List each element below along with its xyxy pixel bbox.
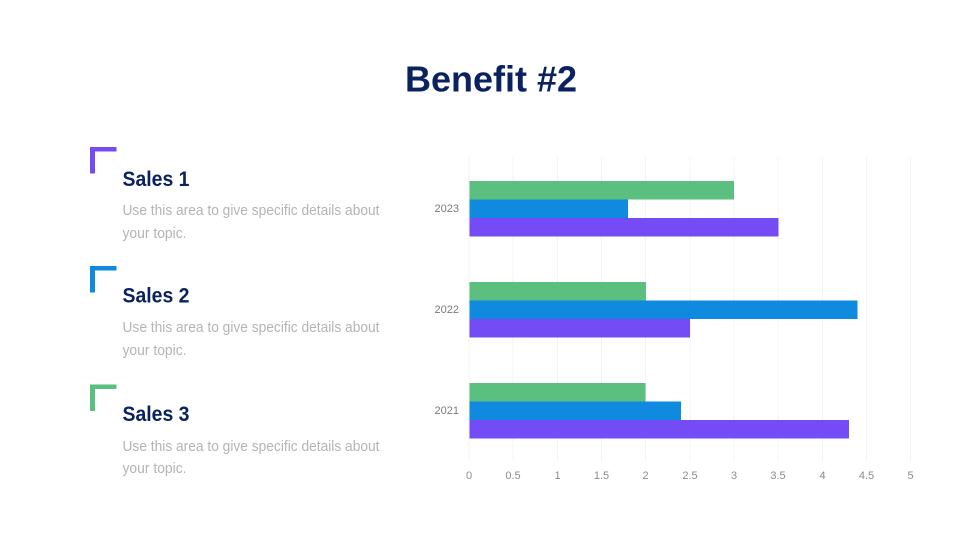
x axis labels: 4.5 [859, 470, 874, 482]
x axis labels: 1.5 [594, 470, 609, 482]
panel: sales 2 [90, 266, 380, 359]
x axis labels [466, 470, 914, 482]
y axis labels: 2022 [435, 304, 459, 316]
icon: purple corner bracket [90, 147, 116, 174]
x axis labels: 3 [731, 470, 737, 482]
x axis labels: 2 [642, 470, 649, 482]
icon: blue corner bracket [90, 266, 116, 292]
x axis labels: 3.5 [770, 470, 786, 482]
bars: 2022 [470, 282, 858, 338]
panel: sales 1 [90, 147, 380, 242]
text block: sales 2 details: your topic. [122, 343, 186, 359]
bars: 2021 [470, 383, 849, 438]
icon: green corner bracket [90, 384, 116, 411]
y axis labels: 2021 [435, 405, 459, 417]
y axis labels: 2023 [435, 203, 459, 215]
x axis labels: 0 [466, 470, 472, 482]
bars: 2023 [470, 181, 778, 236]
text block: sales 3 details: your topic. [122, 461, 186, 477]
title: Benefit #2 [405, 58, 577, 100]
heading: sales 3: Sales 3 [122, 403, 190, 426]
y axis labels [435, 203, 459, 417]
heading: sales 2: Sales 2 [122, 284, 190, 308]
heading: sales 1: Sales 1 [122, 168, 190, 191]
x axis labels: 1 [554, 470, 561, 482]
text block: sales 2 details: Use this area to give specific details about [122, 320, 380, 336]
x axis labels: 0.5 [505, 470, 521, 482]
panel: sales 3 [90, 384, 380, 477]
x axis labels: 4 [819, 470, 826, 482]
text block: sales 1 details: your topic. [122, 226, 186, 242]
text block: sales 1 details: Use this area to give specific details about [122, 203, 380, 219]
x axis labels: 5 [907, 470, 914, 482]
text block: sales 3 details: Use this area to give specific details about [122, 439, 380, 455]
bar chart [435, 157, 914, 482]
x axis labels: 2.5 [682, 470, 698, 482]
